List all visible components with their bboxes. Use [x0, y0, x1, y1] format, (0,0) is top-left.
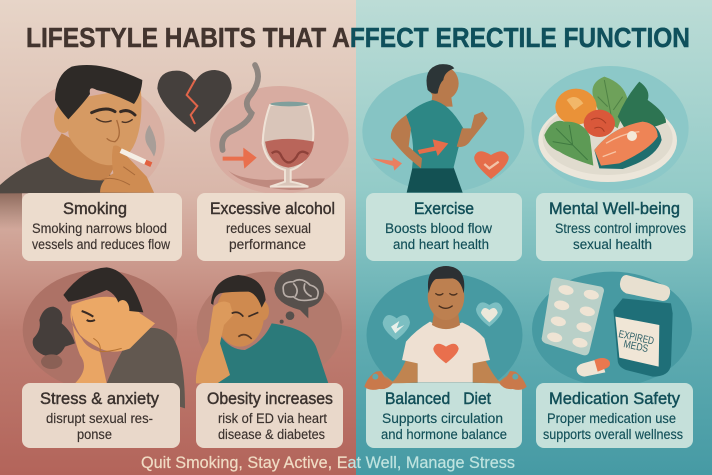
- body: stress line 2: ponse: [77, 427, 112, 442]
- footer tagline: Quit Smoking, Stay Active, Eat Well, Manage Stress: [141, 454, 515, 472]
- body: balanced line 2: and hormone balance: [381, 427, 507, 442]
- heading: balanced diet: Balanced Diet: [385, 389, 491, 408]
- body: mental line 2: sexual health: [573, 237, 652, 252]
- body: exercise line 2: and heart health: [393, 237, 489, 252]
- body: mental line 1: Stress control improves: [555, 221, 686, 236]
- illustration: runner: [362, 64, 524, 193]
- icon: broken heart: [157, 70, 232, 132]
- panel: exercise: [362, 64, 524, 261]
- heading: excessive alcohol: Excessive alcohol: [210, 199, 335, 218]
- body: exercise line 1: Boosts blood flow: [385, 221, 492, 236]
- body: obesity line 1: risk of ED via heart: [218, 411, 327, 426]
- illustration: pills and bottle: [532, 272, 692, 386]
- heading: stress and anxiety: Stress & anxiety: [40, 389, 159, 408]
- heading: obesity: Obesity increases: [207, 389, 333, 408]
- panel: obesity: [196, 269, 343, 448]
- panel: medication safety: [532, 272, 693, 448]
- illustration: wine glass: [210, 65, 349, 194]
- heading: exercise: Exercise: [414, 199, 474, 218]
- label: expired meds line 1: EXPIRED: [617, 328, 655, 347]
- label: expired meds line 2: MEDS: [622, 338, 649, 355]
- panel: smoking: [0, 65, 182, 261]
- card: mental well-being: [536, 193, 693, 261]
- illustration: worried man with thought bubble: [196, 269, 342, 384]
- body: alcohol line 2: performance: [229, 237, 306, 252]
- heading: smoking: Smoking: [63, 199, 127, 218]
- body: smoking line 2: vessels and reduces flow: [32, 237, 170, 252]
- body: balanced line 1: Supports circulation: [382, 411, 503, 426]
- card: smoking: [22, 193, 182, 261]
- panel: mental well-being: [531, 66, 693, 261]
- card: balanced diet: [366, 383, 522, 448]
- background: left warm half: [0, 0, 356, 475]
- heading: medication safety: Medication Safety: [549, 389, 680, 408]
- card: medication safety: [536, 383, 693, 448]
- illustration: meditating man: [364, 266, 527, 390]
- body: medication line 1: Proper medication use: [547, 411, 676, 426]
- card: exercise: [366, 193, 522, 261]
- card: obesity: [196, 383, 343, 448]
- body: medication line 2: supports overall wellness: [543, 427, 683, 442]
- illustration: stressed man: [23, 267, 185, 408]
- panel: balanced diet: [364, 266, 527, 448]
- card: excessive alcohol: [197, 193, 345, 261]
- panel: stress and anxiety: [22, 267, 185, 448]
- card: stress and anxiety: [22, 383, 180, 448]
- body: smoking line 1: Smoking narrows blood: [32, 221, 167, 236]
- background: right teal half: [356, 0, 712, 475]
- body: alcohol line 1: reduces sexual: [226, 221, 311, 236]
- panel: excessive alcohol: [197, 65, 349, 261]
- illustration: smoking man: [0, 65, 165, 229]
- heading: mental well-being: Mental Well-being: [549, 199, 680, 218]
- body: stress line 1: disrupt sexual res-: [46, 411, 153, 426]
- circle backdrop: [366, 273, 522, 397]
- illustration: food plate: [531, 66, 689, 191]
- body: obesity line 2: disease & diabetes: [218, 427, 325, 442]
